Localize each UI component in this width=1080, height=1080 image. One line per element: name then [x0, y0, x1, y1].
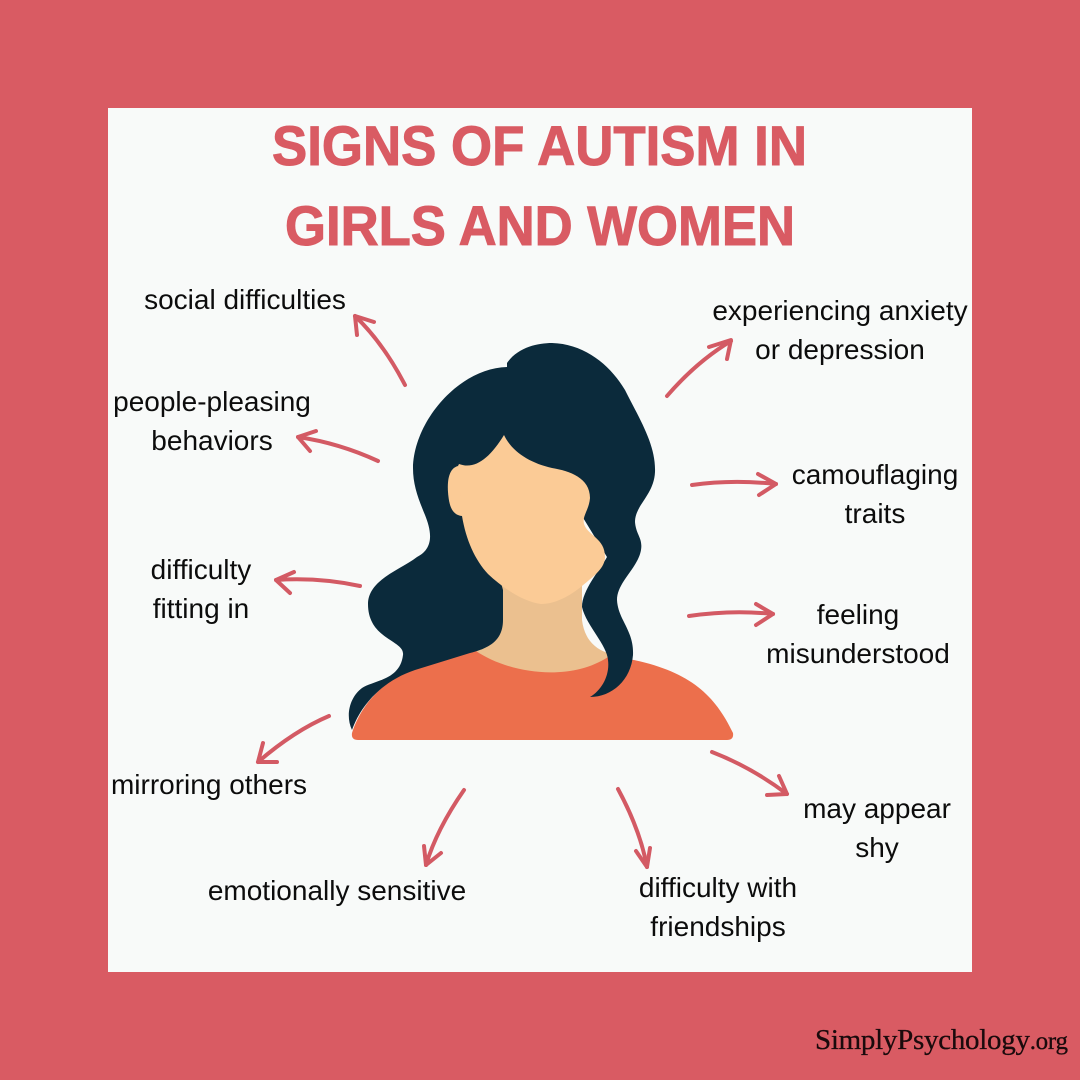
label: camouflaging traits: camouflaging — [792, 459, 958, 490]
arrow: to difficulty with friendships — [618, 789, 650, 867]
label: experiencing anxiety or depression — [712, 295, 968, 365]
panel: content card — [108, 108, 972, 972]
label: may appear shy: shy — [855, 832, 899, 863]
label: emotionally sensitive: emotionally sensitive — [208, 875, 466, 906]
label: feeling misunderstood: feeling — [817, 599, 899, 630]
footer: source credit: SimplyPsychology.org — [815, 1024, 1068, 1056]
title: GIRLS AND WOMEN — [285, 194, 795, 257]
arrow: to mirroring others — [258, 716, 329, 762]
label: feeling misunderstood — [766, 599, 950, 669]
label: may appear shy: may appear — [803, 793, 951, 824]
label: difficulty with friendships: difficulty with — [639, 872, 797, 903]
label: social difficulties: social difficulties — [144, 284, 346, 315]
label: experiencing anxiety or depression: experiencing anxiety — [712, 295, 968, 326]
title — [272, 114, 807, 257]
hair — [349, 343, 655, 730]
neck — [470, 570, 612, 680]
label: feeling misunderstood: misunderstood — [766, 638, 950, 669]
label: mirroring others: mirroring others — [111, 769, 307, 800]
face — [458, 435, 605, 604]
label: camouflaging traits: traits — [845, 498, 905, 529]
label: may appear shy — [803, 793, 951, 863]
arrow: to emotionally sensitive — [424, 790, 464, 865]
arrow: to difficulty fitting in — [276, 572, 360, 593]
label: difficulty fitting in — [151, 554, 251, 624]
arrow: to experiencing anxiety — [667, 340, 731, 396]
label: experiencing anxiety or depression: or depression — [755, 334, 925, 365]
arrow: to camouflaging traits — [692, 474, 776, 495]
arrow: to feeling misunderstood — [689, 604, 773, 625]
label: people-pleasing behaviors: people-pleasing — [113, 386, 311, 417]
label: difficulty with friendships — [639, 872, 797, 942]
label: people-pleasing behaviors: behaviors — [151, 425, 273, 456]
label: camouflaging traits — [792, 459, 958, 529]
label: difficulty fitting in: difficulty — [151, 554, 251, 585]
title: SIGNS OF AUTISM IN — [272, 114, 807, 177]
ear — [448, 466, 470, 516]
illustration: woman with long dark hair — [349, 343, 733, 740]
label: difficulty fitting in: fitting in — [153, 593, 249, 624]
label: difficulty with friendships: friendships — [650, 911, 786, 942]
arrow: to social difficulties — [355, 316, 405, 385]
arrow: to may appear shy — [712, 752, 787, 795]
arrow: to people-pleasing behaviors — [298, 431, 378, 461]
label: people-pleasing behaviors — [113, 386, 311, 456]
shirt — [352, 651, 733, 740]
